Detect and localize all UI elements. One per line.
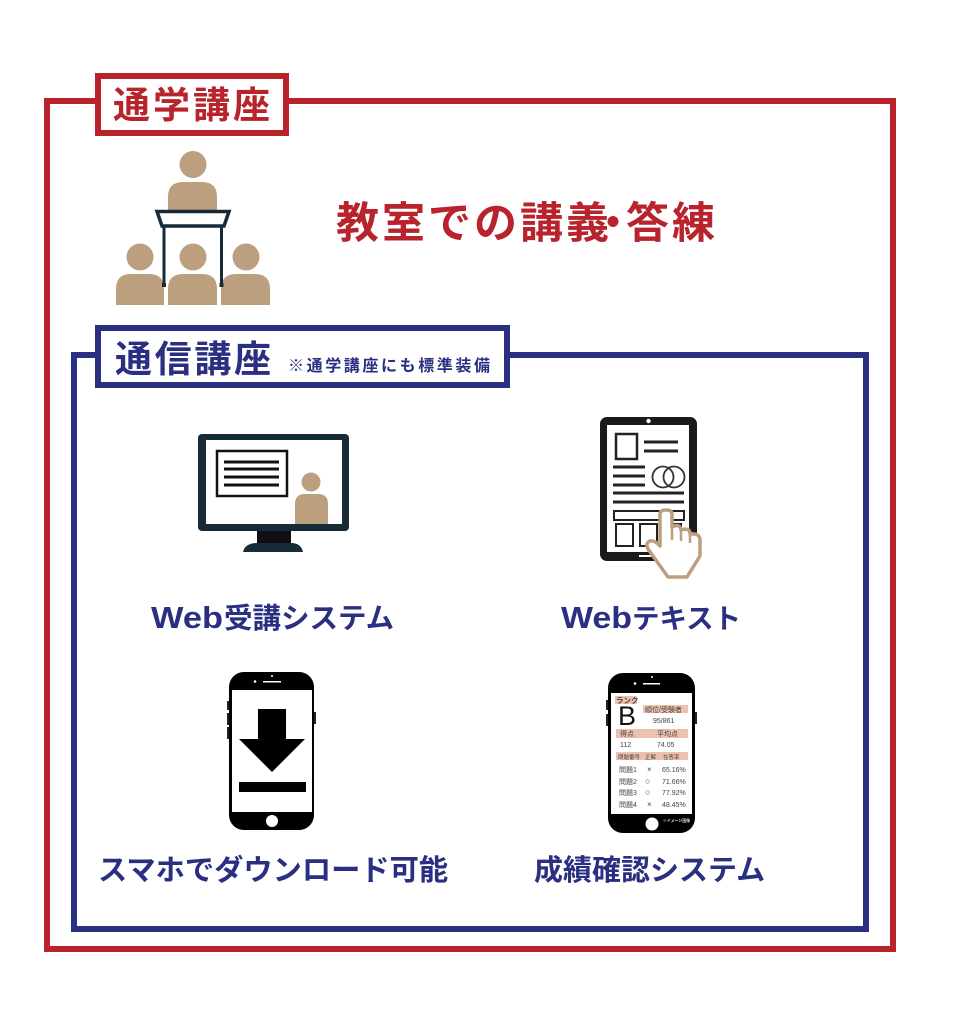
label: スマホでダウンロード可能: スマホでダウンロード可能 bbox=[98, 853, 448, 887]
icon: smartphone grade report: 在答率 bbox=[663, 753, 680, 761]
icon: smartphone grade report bbox=[606, 673, 697, 833]
icon: smartphone grade report: × bbox=[647, 765, 652, 774]
panel: 通学講座 red frame bbox=[47, 101, 893, 949]
icon: smartphone grade report: 48.45% bbox=[662, 802, 686, 809]
icon: smartphone grade report: × bbox=[647, 800, 652, 809]
icon: smartphone grade report: 95/861 bbox=[653, 718, 675, 725]
icon: smartphone grade report: ※イメージ画像 bbox=[663, 817, 690, 823]
icon: smartphone grade report: ランク bbox=[616, 695, 638, 705]
heading: 教室での講義・答練: ・ bbox=[592, 200, 634, 248]
icon: classroom lecture bbox=[116, 151, 270, 305]
icon: smartphone grade report: 得点 bbox=[620, 729, 634, 738]
icon: smartphone grade report: 問題2 bbox=[619, 778, 637, 786]
label: Webテキスト bbox=[561, 600, 741, 635]
icon: smartphone grade report: 順位/受験者 bbox=[645, 705, 682, 714]
label: 成績確認システム: 成績確認システム bbox=[534, 854, 765, 887]
panel: 通信講座 blue frame bbox=[74, 355, 866, 929]
heading: 通信講座 bbox=[98, 328, 507, 385]
icon: smartphone grade report: 平均点 bbox=[657, 729, 678, 738]
icon: smartphone grade report: B bbox=[618, 701, 636, 731]
icon: smartphone grade report: 問題番号 bbox=[618, 754, 641, 761]
icon: smartphone grade report: 問題4 bbox=[619, 801, 637, 809]
icon: smartphone grade report: 65.16% bbox=[662, 767, 686, 774]
icon: smartphone grade report: 77.92% bbox=[662, 790, 686, 797]
icon: smartphone grade report: 71.66% bbox=[662, 779, 686, 786]
label: Web受講システム: Web bbox=[151, 600, 223, 635]
label: Web受講システム bbox=[151, 600, 394, 635]
label: Web受講システム: 受講システム bbox=[224, 603, 394, 635]
label: Webテキスト: テキスト bbox=[632, 603, 741, 634]
heading: 教室での講義・答練: 教室での講義 bbox=[336, 200, 612, 248]
icon: smartphone grade report: 74.05 bbox=[657, 742, 675, 749]
icon: smartphone download bbox=[227, 672, 316, 830]
icon: smartphone grade report: 問題1 bbox=[619, 766, 637, 774]
icon: smartphone grade report: 問題3 bbox=[619, 789, 637, 797]
heading: 通学講座: 通学講座 bbox=[113, 85, 270, 126]
heading: 教室での講義・答練: 答練 bbox=[626, 200, 718, 248]
heading: 通信講座: 通信講座 bbox=[115, 339, 271, 380]
heading: 通学講座 bbox=[98, 76, 286, 133]
heading: 通信講座: ※通学講座にも標準装備 bbox=[288, 356, 490, 375]
icon: smartphone grade report: ○ bbox=[645, 787, 650, 797]
label: Webテキスト: Web bbox=[561, 600, 632, 635]
icon: smartphone grade report: 正解 bbox=[645, 753, 657, 761]
icon: web lecture monitor bbox=[198, 434, 349, 552]
icon: web text tablet bbox=[600, 417, 700, 577]
icon: smartphone grade report: ○ bbox=[645, 776, 650, 786]
icon: smartphone grade report: 112 bbox=[620, 742, 631, 749]
